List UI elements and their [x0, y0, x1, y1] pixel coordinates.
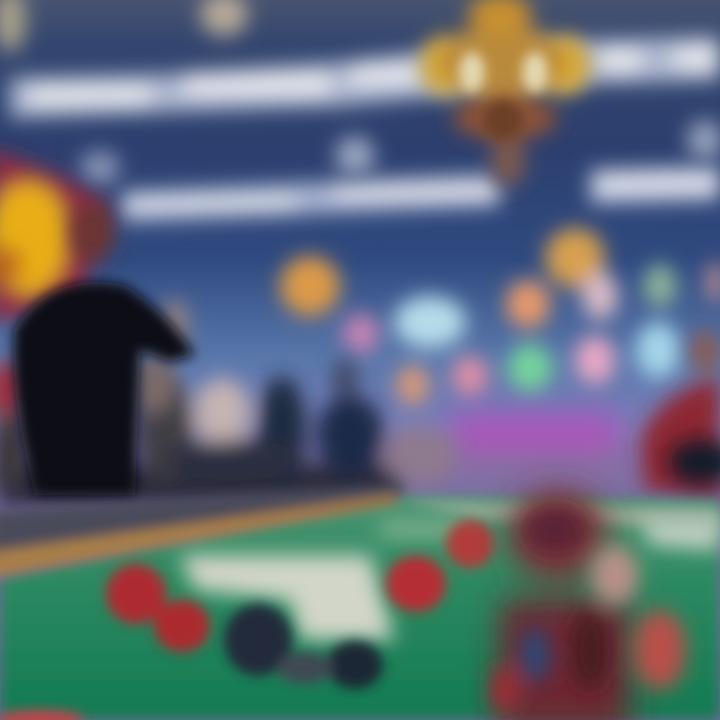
person in black: [0, 202, 195, 495]
person in red: [640, 330, 720, 500]
light bands: [10, 36, 720, 222]
red chip bottom left: [0, 710, 84, 720]
red dice: [106, 520, 494, 652]
dark chips: [224, 604, 383, 689]
table felt: [0, 496, 720, 720]
ceiling lamps: [0, 0, 720, 186]
character figurine: [491, 489, 686, 720]
table rail: [0, 484, 720, 578]
white betting area: [180, 520, 720, 640]
yellow sign: [0, 150, 105, 320]
chandelier: [421, 0, 589, 186]
background crowd: [0, 358, 456, 505]
coloured lights: [280, 228, 720, 405]
purple glow band: [390, 415, 640, 490]
